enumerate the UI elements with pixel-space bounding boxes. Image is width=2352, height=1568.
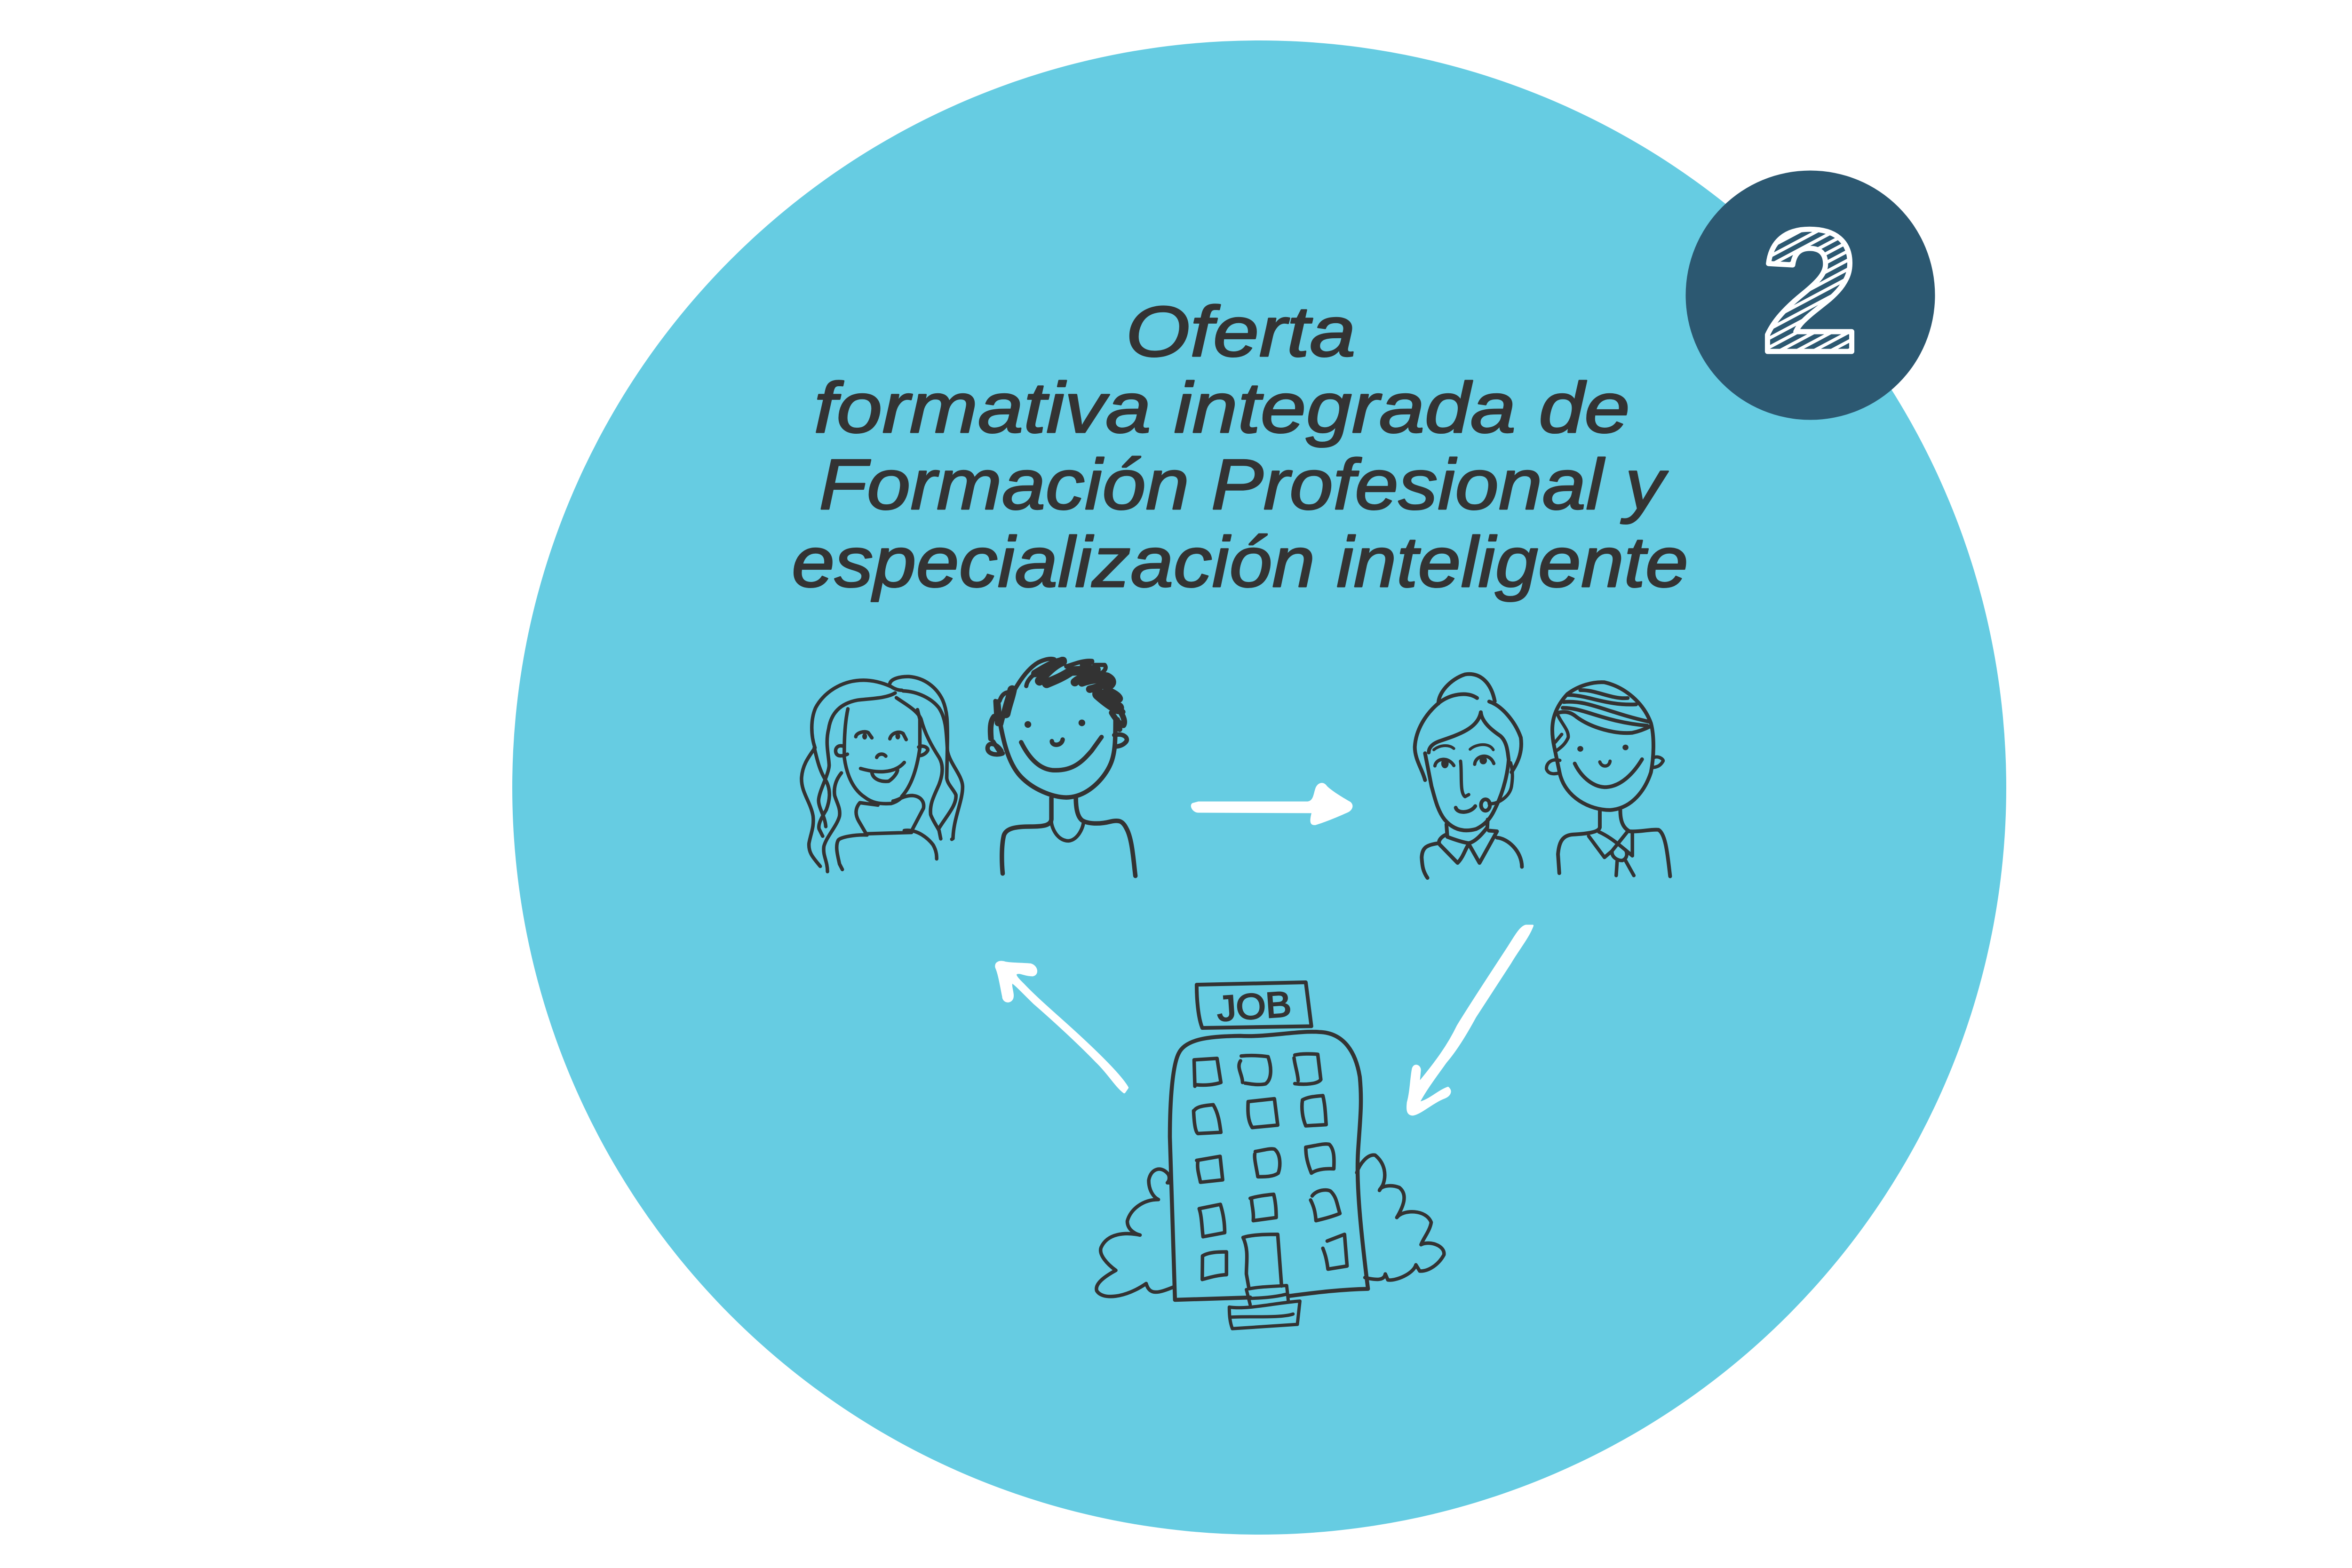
title: formativa integrada de <box>814 368 1630 448</box>
icon: young man with curly hair <box>987 659 1136 876</box>
arrow: up-left <box>996 962 1128 1092</box>
icon: company building <box>1097 982 1444 1329</box>
number badge <box>1686 170 1935 420</box>
building sign text: JOB <box>1216 984 1293 1029</box>
title <box>792 292 1688 602</box>
icon: man with tie <box>1546 682 1670 876</box>
arrows <box>996 783 1533 1114</box>
arrow: right <box>1191 783 1352 825</box>
title: Formación Profesional y <box>819 445 1669 525</box>
icon: woman with headset <box>1415 674 1522 878</box>
icon: professionals <box>1415 674 1670 878</box>
number 2: 2 <box>1762 193 1859 389</box>
arrow: down-left <box>1407 926 1533 1114</box>
icon: students <box>802 659 1136 876</box>
panel: main blue circle <box>512 40 2006 1535</box>
title: especialización inteligente <box>792 522 1688 602</box>
icon: woman with long hair <box>802 677 962 872</box>
man's hair <box>991 659 1124 739</box>
title: Oferta <box>1126 292 1356 372</box>
